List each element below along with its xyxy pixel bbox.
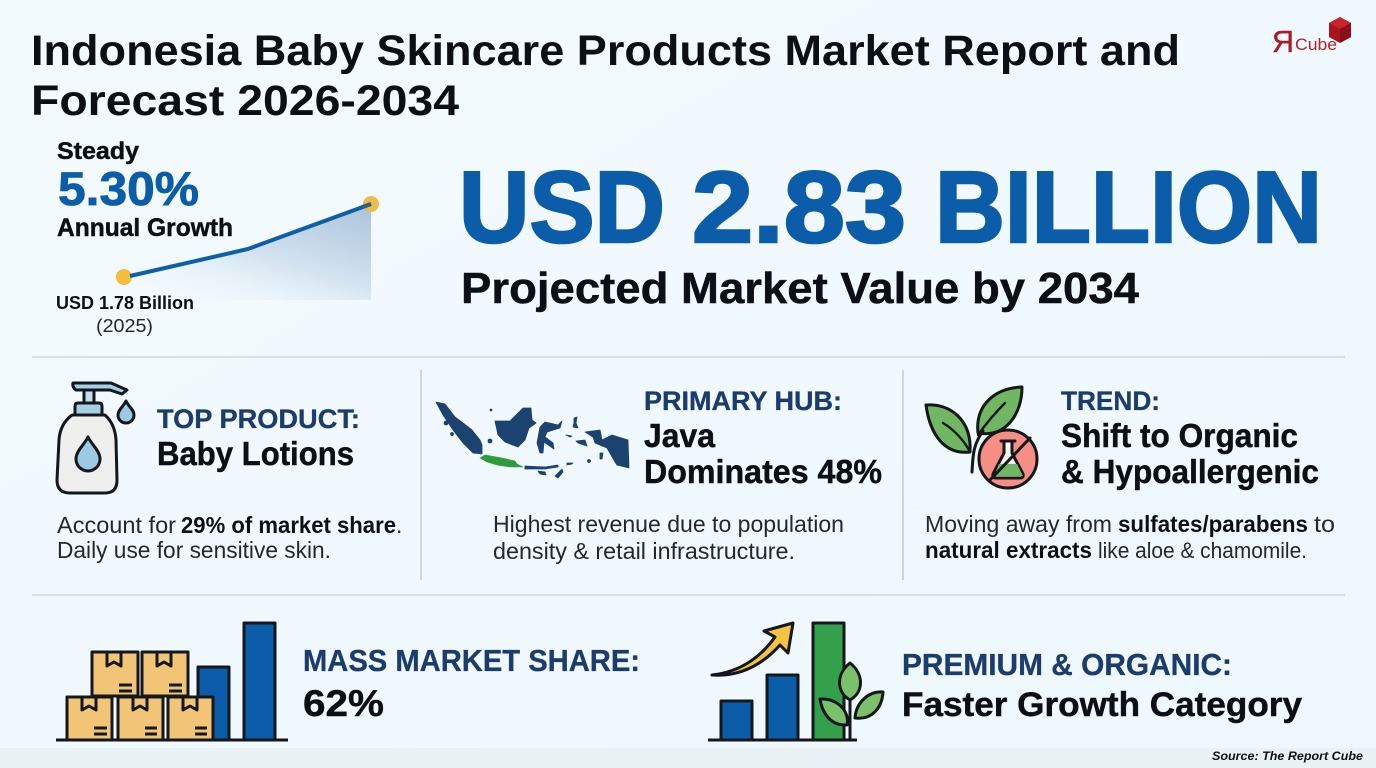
primary hub description: density & retail infrastructure.	[493, 538, 795, 564]
icon: lotion bottle	[57, 383, 134, 493]
headline subtitle: Projected Market Value by 2034	[461, 264, 1140, 313]
panel: trend	[925, 386, 1335, 563]
growth callout text: Steady	[57, 138, 140, 165]
primary hub heading: Java	[644, 417, 716, 454]
top product description	[57, 512, 402, 563]
headline value: USD	[459, 152, 665, 264]
panel: top product	[57, 383, 402, 563]
title: Indonesia Baby Skincare Products Market Report and	[31, 27, 1180, 75]
top product heading	[157, 404, 360, 472]
primary hub heading: Dominates 48%	[644, 453, 882, 490]
chart start label: USD 1.78 Billion	[56, 293, 194, 313]
trend description: like aloe & chamomile.	[1098, 538, 1307, 563]
icon: rising bars, arrow and plant	[708, 623, 883, 740]
chart start label	[56, 293, 194, 336]
trend description: to	[1314, 511, 1335, 537]
growth callout text: Annual Growth	[57, 214, 233, 242]
title	[31, 27, 1180, 125]
top product heading: Baby Lotions	[157, 435, 354, 472]
icon: boxes and bars	[56, 623, 288, 740]
trend description	[925, 511, 1335, 563]
primary hub heading	[644, 386, 882, 490]
mass market text	[303, 643, 640, 724]
top product description: Account for	[57, 512, 176, 538]
logo: RCube: Я	[1272, 24, 1294, 59]
primary hub heading: PRIMARY HUB:	[644, 386, 842, 416]
growth callout text	[57, 138, 233, 242]
logo: RCube: Cube	[1295, 35, 1337, 54]
trend description: natural extracts	[925, 537, 1092, 563]
headline value: 2.83	[692, 152, 906, 264]
primary hub description: Highest revenue due to population	[493, 511, 844, 537]
premium text: PREMIUM & ORGANIC:	[902, 647, 1232, 682]
headline value: BILLION	[935, 152, 1322, 264]
icon: Indonesia map	[436, 402, 629, 478]
panel: premium and organic	[708, 623, 1302, 740]
source note: Source: The Report Cube	[1212, 749, 1363, 763]
premium text: Faster Growth Category	[902, 686, 1302, 724]
title: Forecast 2026-2034	[31, 77, 459, 125]
chart start label: (2025)	[96, 316, 153, 336]
trend heading: Shift to Organic	[1061, 417, 1298, 454]
top product description: Daily use for sensitive skin.	[57, 537, 331, 563]
top product description: .	[396, 512, 402, 538]
headline value	[459, 152, 1322, 264]
primary hub description	[493, 511, 844, 564]
icon: leaves and crossed-out flask	[926, 387, 1037, 488]
premium text	[902, 647, 1302, 724]
trend heading: & Hypoallergenic	[1061, 453, 1319, 490]
line chart: growth 2025 to 2034	[116, 196, 379, 300]
logo: RCube	[1272, 17, 1351, 59]
trend description: sulfates/parabens	[1118, 511, 1308, 537]
trend heading: TREND:	[1061, 386, 1160, 416]
top product description: 29% of market share	[181, 512, 396, 538]
mass market text: MASS MARKET SHARE:	[303, 643, 640, 678]
trend heading	[1061, 386, 1319, 490]
growth callout text: 5.30%	[58, 162, 199, 215]
top product heading: TOP PRODUCT:	[157, 404, 360, 434]
mass market text: 62%	[303, 683, 384, 724]
panel: primary hub	[436, 386, 882, 564]
trend description: Moving away from	[925, 511, 1112, 537]
panel: mass market share	[56, 623, 640, 740]
